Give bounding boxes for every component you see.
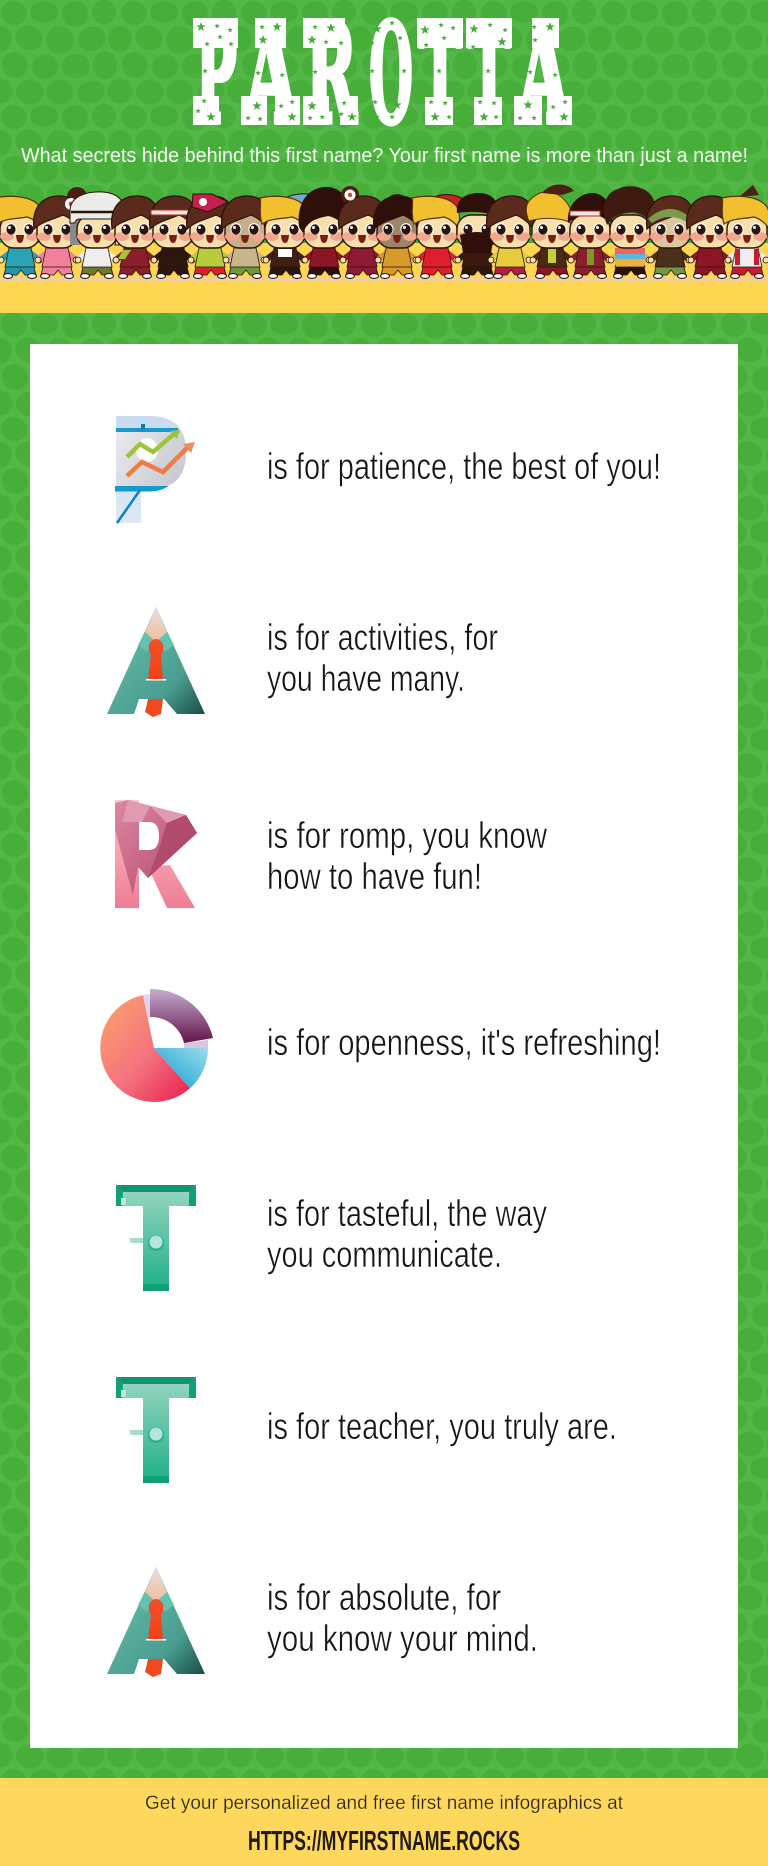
- child 1: blond in teal overalls: [0, 196, 43, 278]
- text: T line: you communicate.: [267, 1234, 502, 1275]
- child 16: headband and maroon robe: [568, 193, 612, 278]
- footer call to action: Get your personalized and free first name infographics at: [145, 1793, 624, 1814]
- icon: second letter A as suit and tie: [107, 1567, 205, 1677]
- child 14: polka dot skirt: [487, 196, 534, 278]
- panel: white letter list: [30, 344, 738, 1748]
- child 9: tall dark hair and maroon coat: [299, 187, 348, 278]
- text: R line: is for romp, you know: [267, 815, 547, 856]
- child 8: blond with blue cap and dark apron: [260, 194, 321, 278]
- child 5: headband and black outfit: [150, 196, 197, 278]
- child 19: maroon robe: [687, 196, 734, 278]
- child 18: green headdress and grass skirt: [647, 196, 694, 278]
- text: R line: how to have fun!: [267, 856, 482, 897]
- child 11: dark skin, orange wrap: [374, 194, 421, 278]
- child 4: green and maroon robe: [112, 196, 159, 278]
- text: second A line: you know your mind.: [267, 1618, 538, 1659]
- text: second T line: is for teacher, you truly are.: [267, 1406, 617, 1447]
- child 10: flower bun, maroon dress: [339, 186, 386, 278]
- banner: yellow strip with row of cartoon children: [0, 184, 768, 313]
- icon: letter R as pink gem: [115, 800, 197, 908]
- text: R line: [267, 815, 547, 897]
- child 6: red fez and red skirt: [187, 194, 234, 278]
- child 2: pink kimono with flower bun: [34, 187, 87, 278]
- text: A line: you have many.: [267, 658, 465, 699]
- icon: letter O as pie chart: [100, 989, 213, 1102]
- child 12: blond with red cap and dress: [412, 194, 467, 278]
- icon: letter T as door: [116, 1185, 196, 1291]
- child 7: tan skin and grass skirt: [222, 196, 269, 278]
- tagline: What secrets hide behind this first name? Your first name is more than just a name!: [21, 145, 748, 167]
- text: A line: is for activities, for: [267, 617, 498, 658]
- text: T line: [267, 1193, 547, 1275]
- footer URL: HTTPS://MYFIRSTNAME.ROCKS: [248, 1825, 520, 1856]
- text: second A line: [267, 1577, 538, 1659]
- title: PAROTTA: [193, 0, 572, 155]
- text: T line: is for tasteful, the way: [267, 1193, 547, 1234]
- child 20: blond, white and red outfit: [722, 185, 768, 278]
- title star decoration: [195, 20, 569, 121]
- text: O line: is for openness, it's refreshing!: [267, 1022, 661, 1063]
- child 15: blond with olive vest: [526, 184, 575, 278]
- text: A line: [267, 617, 498, 699]
- footer: [0, 1778, 768, 1866]
- icon: second letter T as door: [116, 1377, 196, 1483]
- child 17: rainbow stripe top: [604, 186, 655, 278]
- child 13: black beard, dark robe: [455, 193, 499, 278]
- icon: letter A as suit and tie: [107, 607, 205, 717]
- text: P line: is for patience, the best of you!: [267, 446, 661, 487]
- child 3: white head scarf: [70, 192, 124, 278]
- text: second A line: is for absolute, for: [267, 1577, 501, 1618]
- icon: letter P with chart arrows: [116, 416, 195, 523]
